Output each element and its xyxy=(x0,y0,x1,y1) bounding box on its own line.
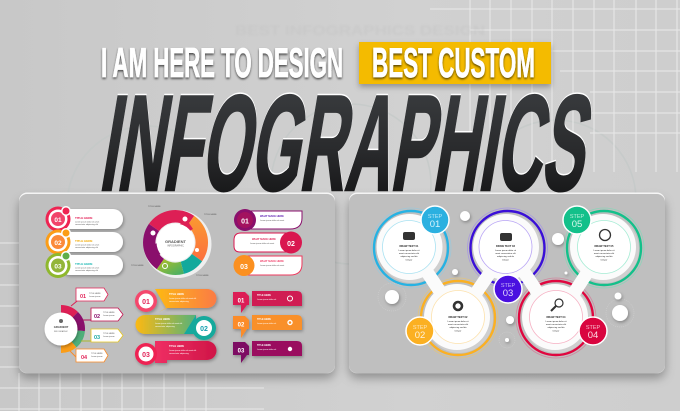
banner 03: Lorem ipsum dolor sit amet elit xyxy=(169,349,197,352)
list: four arrow labels around a circle: INFOGRAPHIC xyxy=(54,330,68,333)
step badge 01 xyxy=(421,206,449,234)
row 03: 03 xyxy=(54,264,62,270)
step 05 circle: DRAW TEXT 05 xyxy=(595,244,614,248)
chart: gradient cycle donut: TITLE HERE xyxy=(148,206,161,208)
tag row 03: TITLE HERE xyxy=(257,344,271,347)
step 04 circle xyxy=(516,278,596,358)
badge: best custom xyxy=(359,39,551,86)
ribbon 03: WHAT MAKE HERE xyxy=(260,259,284,263)
ribbon 03 xyxy=(234,255,302,276)
list: gradient banners xyxy=(135,289,216,365)
label 01 xyxy=(76,288,108,301)
ribbon 03: Lorem ipsum dolor sit amet xyxy=(260,264,285,267)
chart: gradient cycle donut: INFOGRAPHIC xyxy=(167,244,184,248)
banner 03 xyxy=(135,341,216,365)
banner 03: TITLE HERE xyxy=(169,344,184,348)
chart: gradient cycle donut: TITLE HERE xyxy=(196,275,209,277)
label 04 xyxy=(76,349,108,362)
row 01: Lorem ipsum dolor sit amet xyxy=(75,220,100,224)
row 01: TITLE HERE xyxy=(75,216,93,220)
step 01 circle: Lorem ipsum dolor sit xyxy=(399,249,420,252)
icon: magnifier xyxy=(551,299,563,311)
panel: infographic templates xyxy=(19,192,335,374)
step badge 03: STEP xyxy=(501,283,516,289)
chart: gradient cycle donut: TITLE HERE xyxy=(131,265,144,267)
list: speech tag rows xyxy=(233,291,302,363)
tag row 03 xyxy=(233,341,302,363)
banner 01: Lorem ipsum dolor sit amet elit xyxy=(169,297,197,300)
step 01 circle: adipiscing sed do xyxy=(401,256,418,258)
tag row 03: 03 xyxy=(238,348,245,354)
step 03 circle: adipiscing sed do xyxy=(497,256,515,258)
step 04 circle: amet consectetur elit xyxy=(546,323,566,326)
step 02 circle: Lorem ipsum dolor sit xyxy=(448,320,469,323)
row 03: Lorem ipsum dolor sit amet xyxy=(75,266,100,270)
step 04 circle: DRAW TEXT 04 xyxy=(547,315,566,319)
ribbon 01: Lorem ipsum dolor sit amet xyxy=(260,219,285,222)
label 01: Lorem ipsum xyxy=(89,296,101,298)
row 02: 02 xyxy=(54,240,62,247)
row 01: consectetur adipiscing elit xyxy=(75,223,98,226)
label 03: 03 xyxy=(94,335,100,341)
step badge 01: STEP xyxy=(428,214,443,220)
step 02 circle: tempor xyxy=(455,330,462,332)
chart: gradient cycle donut: GRADIENT xyxy=(165,239,186,244)
step 02 circle: amet consectetur elit xyxy=(448,323,468,326)
tag row 03: Lorem ipsum dolor sit xyxy=(257,348,277,351)
step badge 03: 03 xyxy=(503,288,513,299)
decorative dots xyxy=(378,211,634,348)
label 02 xyxy=(91,308,123,321)
banner 01: consectetur adipiscing xyxy=(169,300,189,303)
chart: gradient cycle donut xyxy=(131,206,217,278)
tag row 02: 02 xyxy=(238,322,245,328)
step 05 circle: amet consectetur elit xyxy=(594,252,614,255)
banner 03: consectetur adipiscing xyxy=(169,352,189,355)
row 02: TITLE HERE xyxy=(75,239,93,243)
label 01: TITLE HERE xyxy=(89,293,101,295)
ribbon 01 xyxy=(234,209,302,231)
tag row 02 xyxy=(233,315,302,338)
label 03: Lorem ipsum xyxy=(103,336,115,338)
ribbon 02: WHAT MAKE HERE xyxy=(252,237,276,241)
step badge 02: 02 xyxy=(415,330,425,341)
ribbon 02 xyxy=(234,232,302,254)
banner 01: 01 xyxy=(142,299,150,306)
step badge 05: STEP xyxy=(570,214,585,220)
tag row 02: Lorem ipsum dolor sit xyxy=(257,322,277,325)
step 01 circle: amet consectetur elit xyxy=(399,252,419,255)
badge: best custom: BEST CUSTOM xyxy=(372,39,535,86)
banner 03: 03 xyxy=(142,352,150,359)
row 03 xyxy=(46,251,123,278)
step badge 05 xyxy=(563,206,591,234)
tag row 01: Lorem ipsum dolor sit xyxy=(257,298,277,301)
tag row 02: TITLE HERE xyxy=(257,318,271,321)
label 04: 04 xyxy=(81,355,88,361)
headline line: I am here to design: I AM HERE TO DESIGN xyxy=(101,39,343,86)
step badge 02: STEP xyxy=(413,325,428,331)
banner 01 xyxy=(135,289,216,312)
banner 01: TITLE HERE xyxy=(169,292,184,296)
row 01: 01 xyxy=(54,217,62,224)
step 03 circle: tempor xyxy=(502,258,509,262)
list: four arrow labels around a circle xyxy=(44,288,123,362)
label 02: 02 xyxy=(94,314,100,320)
step 04 circle: tempor xyxy=(553,330,560,332)
row 02 xyxy=(46,228,123,254)
background: BEST INFOGRAPHICS DESIGN xyxy=(235,22,485,38)
list: outlined ribbon rows xyxy=(234,209,302,276)
label 01: 01 xyxy=(80,294,86,300)
step badge 01: 01 xyxy=(430,219,440,230)
step 02 circle: adipiscing sed do xyxy=(450,327,467,329)
step 02 circle xyxy=(418,278,498,358)
ribbon 02: 02 xyxy=(287,241,295,248)
step badge 04: 04 xyxy=(588,330,598,341)
label 02: Lorem ipsum xyxy=(103,315,115,317)
banner 02 xyxy=(136,315,216,340)
step 04 circle: adipiscing sed do xyxy=(548,327,565,329)
row 01 xyxy=(46,206,123,232)
step badge 05: 05 xyxy=(572,219,582,230)
row 02: Lorem ipsum dolor sit amet xyxy=(75,244,100,246)
step badge 03 xyxy=(494,275,522,303)
step 04 circle: Lorem ipsum dolor sit xyxy=(546,320,567,323)
ribbon 02: Lorem ipsum dolor sit amet xyxy=(250,242,275,245)
label 03 xyxy=(91,329,123,342)
banner 02: 02 xyxy=(200,326,208,333)
step badge 02 xyxy=(406,317,434,345)
step 05 circle xyxy=(564,208,644,288)
step 01 circle xyxy=(371,208,451,288)
label 03: TITLE HERE xyxy=(103,333,115,335)
ribbon 03: 03 xyxy=(240,264,248,271)
step 03 circle: amet consectetur elit xyxy=(495,252,516,255)
step 03 circle xyxy=(468,208,548,288)
row 03: consectetur adipiscing elit xyxy=(75,269,98,272)
step 05 circle: tempor xyxy=(601,258,608,262)
step 02 circle: DRAW TEXT 02 xyxy=(449,315,468,319)
label 04: Lorem ipsum xyxy=(91,356,103,358)
step badge 04 xyxy=(579,317,607,345)
panel: five step circles xyxy=(349,192,665,374)
step 01 circle: DRAW TEXT 01 xyxy=(400,244,419,248)
list: three pill rows xyxy=(46,206,123,278)
step 01 circle: tempor xyxy=(406,258,413,262)
ribbon 01: WHAT MAKE HERE xyxy=(260,214,284,218)
step badge 04: STEP xyxy=(586,325,601,331)
step 05 circle: Lorem ipsum dolor sit xyxy=(594,249,615,252)
tag row 01: 01 xyxy=(238,298,245,304)
label 02: TITLE HERE xyxy=(103,312,115,314)
tag row 01: TITLE HERE xyxy=(257,294,271,297)
banner 02: Lorem ipsum dolor sit amet elit xyxy=(155,322,183,325)
tag row 01 xyxy=(233,291,302,313)
chart: gradient cycle donut: TITLE HERE xyxy=(204,214,217,216)
label 04: TITLE HERE xyxy=(91,353,103,355)
step 05 circle: adipiscing sed do xyxy=(596,256,613,258)
ribbon 01: 01 xyxy=(241,218,249,226)
row 02: consectetur adipiscing elit xyxy=(75,246,98,249)
step 03 circle: DRAW TEXT 03 xyxy=(496,244,515,248)
list: four arrow labels around a circle: GRADIENT xyxy=(54,325,69,329)
connectors between circles xyxy=(427,272,587,293)
row 03: TITLE HERE xyxy=(75,262,93,266)
banner 02: TITLE HERE xyxy=(155,317,170,321)
step 03 circle: Lorem ipsum dolor sit xyxy=(495,249,516,252)
banner 02: consectetur adipiscing xyxy=(155,325,175,328)
